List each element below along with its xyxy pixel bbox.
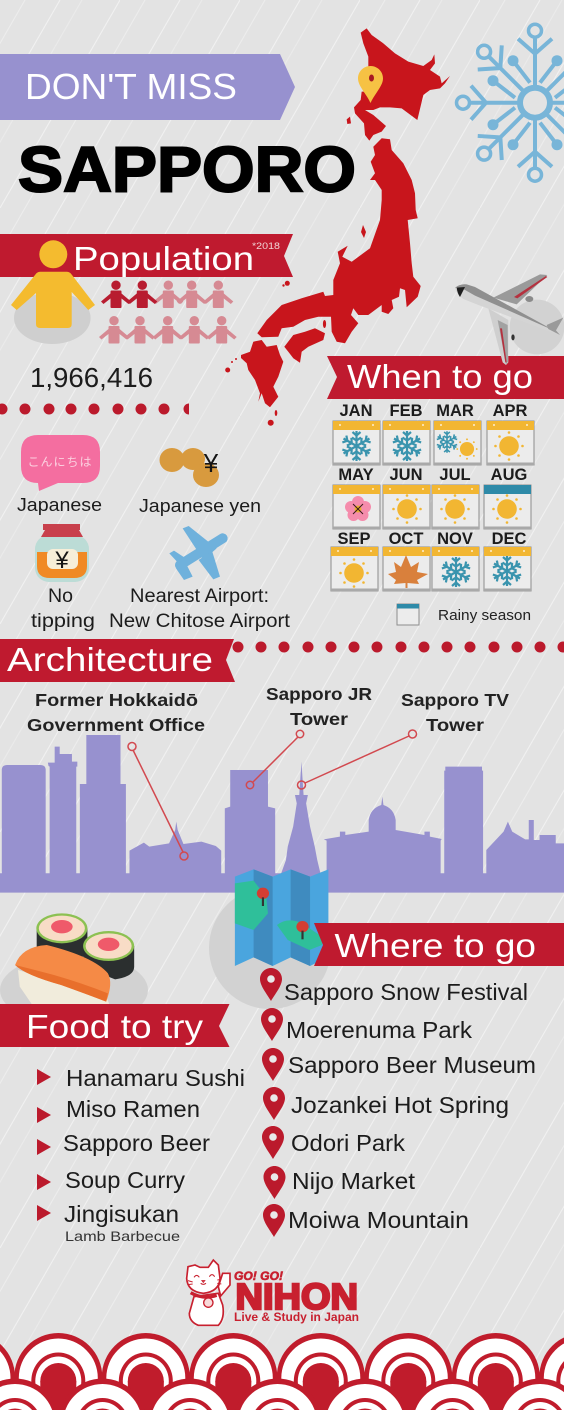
heading: architecture ribbon: Architecture [7,641,213,678]
list: places with pins: Odori Park [291,1130,406,1156]
list: foods: Soup Curry [65,1167,186,1193]
month labels: JAN [339,402,373,420]
label: Sapporo TV Tower [401,690,509,735]
list: places with pins: Moerenuma Park [286,1017,473,1043]
skyline [0,735,564,893]
list: places with pins [260,968,536,1237]
label: Sapporo JR Tower: Sapporo JR [266,684,372,704]
month labels: DEC [492,530,526,548]
logo: Go! Go! Nihon [187,1260,359,1325]
icon: tip jar: ¥ [54,547,69,574]
month labels [337,402,527,548]
icon: speech bubble: こんにちは [27,455,93,469]
label: former Hokkaido government office [27,690,205,735]
banner: DON'T MISS: DON'T MISS [25,66,237,107]
label: nearest airport: New Chitose Airport [109,611,291,632]
month labels: APR [493,402,527,420]
list: foods: Jingisukan [64,1201,179,1227]
heading: food to try ribbon [0,1004,230,1047]
dotted divider left [0,404,189,415]
list: foods: Lamb Barbecue [65,1228,180,1244]
list: foods: Sapporo Beer [63,1130,210,1156]
icon: yellow person [11,240,95,344]
logo: Go! Go! Nihon: NIHON [236,1276,358,1317]
list: foods: Miso Ramen [66,1096,200,1122]
label: Sapporo TV Tower: Sapporo TV [401,690,509,710]
icon: yen coins: ¥ [203,448,219,478]
label: Japanese: Japanese [17,495,102,515]
panel: where to go [209,869,564,1237]
icon: yellow location pin [358,66,383,103]
icon: blue airplane [169,526,223,580]
month labels: MAY [338,466,374,484]
title: SAPPORO: SAPPORO [18,134,356,206]
icon: folded map [209,869,331,1009]
heading: population ribbon [0,234,293,277]
month labels: JUN [389,466,423,484]
icon: airplane over grey circle [455,274,564,365]
decorative wave border [0,1333,564,1410]
logo: Go! Go! Nihon: GO! GO! [234,1269,283,1283]
banner: DON'T MISS [0,54,295,120]
panel: architecture [0,639,564,893]
label: no tipping: No [48,586,73,607]
panel: population [0,234,293,393]
icon: lucky cat [187,1260,230,1325]
label: Sapporo JR Tower [266,684,372,729]
icon: tip jar [35,524,89,582]
label: former Hokkaido government office: Former Hokkaidō [35,690,198,710]
heading: where to go ribbon [314,923,564,966]
panel: travel facts [17,435,291,632]
callout lines [128,730,416,860]
label: Sapporo JR Tower: Tower [290,709,348,729]
label: nearest airport [109,586,291,632]
pictogram: ten people, two highlighted [99,280,237,344]
icon: yen coins [160,448,219,487]
panel: food to try [0,913,245,1244]
legend: rainy season [397,604,531,625]
month labels: FEB [390,402,423,420]
icon: sushi [0,913,148,1026]
icon: large snowflake [456,24,564,181]
month labels: NOV [437,530,473,548]
logo: Go! Go! Nihon: Live & Study in Japan [234,1310,359,1324]
heading: architecture ribbon [0,639,235,682]
month labels: MAR [436,402,474,420]
heading: where to go ribbon: Where to go [334,927,536,964]
panel: when to go [327,356,564,625]
month labels: AUG [491,466,527,484]
list: foods [37,1065,245,1244]
heading: population ribbon: *2018 [252,241,280,251]
heading: food to try ribbon: Food to try [26,1008,204,1045]
calendar grid [331,421,534,591]
heading: population ribbon: Population [73,240,254,277]
list: foods: Hanamaru Sushi [66,1065,245,1091]
population number: 1,966,416 [30,362,153,393]
list: places with pins: Sapporo Beer Museum [288,1052,536,1078]
label: former Hokkaido government office: Government Office [27,715,205,735]
label: no tipping [31,586,95,632]
label: Sapporo TV Tower: Tower [426,715,484,735]
list: places with pins: Sapporo Snow Festival [284,979,528,1005]
label: nearest airport: Nearest Airport: [130,586,269,607]
list: places with pins: Moiwa Mountain [288,1207,469,1233]
label: Japanese yen: Japanese yen [139,496,261,516]
month labels: JUL [439,466,471,484]
list: places with pins: Jozankei Hot Spring [291,1092,509,1118]
legend: rainy season: Rainy season [438,608,531,624]
icon: speech bubble [21,435,100,491]
label: no tipping: tipping [31,611,95,632]
map of Japan [225,28,450,426]
heading: when to go ribbon [327,356,564,399]
month labels: OCT [389,530,423,548]
dotted divider right [232,642,564,652]
heading: when to go ribbon: When to go [347,358,533,395]
month labels: SEP [337,530,371,548]
list: places with pins: Nijo Market [292,1168,416,1194]
